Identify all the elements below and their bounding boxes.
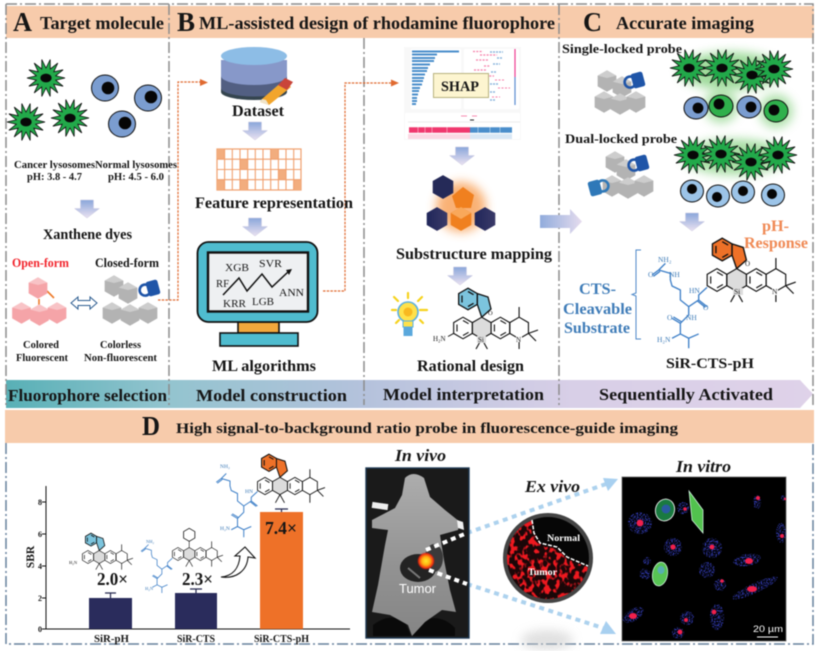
colorless non-fluorescent label: Colorless xyxy=(100,339,142,351)
icon: substructure hexagons xyxy=(427,175,495,232)
CTS cleavable substrate label: CTS- xyxy=(579,281,616,298)
cancer lysosome label xyxy=(14,160,95,183)
normal lysosome label xyxy=(95,160,177,183)
SiR-CTS-pH structure: O xyxy=(745,260,750,268)
label: fluorophore selection: Fluorophore selection xyxy=(8,386,168,405)
lock icon top xyxy=(627,154,650,174)
arrow down xyxy=(74,200,100,218)
dotted arrow to in vitro, upper xyxy=(467,478,618,533)
lock icon xyxy=(138,279,161,299)
heading A xyxy=(13,7,164,37)
molecule SiR-CTS: NH₂ xyxy=(146,539,154,544)
tumor label: Tumor xyxy=(399,582,436,596)
normal cells, not glowing xyxy=(680,180,784,207)
xanthene dyes label: Xanthene dyes xyxy=(43,227,132,243)
heading B xyxy=(177,7,555,37)
x labels: SiR-pH xyxy=(94,634,129,645)
glowing cancer cells xyxy=(670,50,793,94)
SiR-CTS-pH structure: O xyxy=(667,313,673,322)
bar chart: SBR: 8 xyxy=(38,498,42,507)
ex vivo tissue image xyxy=(505,515,591,610)
label: model interpretation: Model interpretation xyxy=(383,385,545,404)
SiR-CTS-pH structure xyxy=(648,238,796,348)
in vivo mouse image xyxy=(366,468,469,638)
single-locked label: Single-locked probe xyxy=(562,41,682,56)
rational design molecule: O xyxy=(488,310,493,317)
icon: monitor with algorithms xyxy=(198,242,318,346)
glowing cancer cells xyxy=(674,136,797,180)
in vivo label: In vivo xyxy=(394,446,446,465)
closed-form molecule xyxy=(103,275,157,326)
SiR-CTS-pH label: SiR-CTS-pH xyxy=(666,356,754,372)
x labels xyxy=(94,634,309,645)
panel D: high signal-to-background imaging xyxy=(25,446,786,650)
cancer lysosome label: Cancer lysosomes xyxy=(14,160,95,171)
bar: SiR-CTS-pH xyxy=(260,509,303,629)
dotted arrow to in vitro, lower xyxy=(467,584,616,634)
pH-response label: Response xyxy=(744,235,808,252)
CTS cleavable substrate label: Substrate xyxy=(564,320,630,337)
panel D header band: High signal-to-background ratio probe in fluorescence-guide imaging xyxy=(176,421,679,437)
SHAP plots xyxy=(404,47,521,140)
blue cells xyxy=(620,495,786,639)
tumor label: Tumor xyxy=(528,568,558,578)
panel B: model construction xyxy=(195,47,353,375)
open-form label: Open-form xyxy=(12,256,70,270)
heading B: B xyxy=(177,7,195,37)
panel: model interpretation xyxy=(392,47,552,375)
rational design molecule: Si xyxy=(478,336,484,344)
soft shadow xyxy=(521,630,573,650)
bar chart: SBR: 0 xyxy=(38,625,42,634)
feature representation label: Feature representation xyxy=(195,195,353,212)
icon: monitor with algorithms: LGB xyxy=(252,297,274,308)
ML algorithms label: ML algorithms xyxy=(212,358,316,375)
SiR-CTS-pH structure: HN xyxy=(689,286,700,295)
normal label: Normal xyxy=(547,534,580,544)
colorless non-fluorescent label: Non-fluorescent xyxy=(84,352,157,364)
molecule SiR-pH: H₂N xyxy=(69,560,78,565)
rational design molecule: N xyxy=(516,336,521,344)
SiR-CTS-pH structure: NH₂ xyxy=(658,255,672,264)
red lysosomes xyxy=(629,496,786,634)
in vitro label: In vitro xyxy=(675,457,731,476)
value labels: 7.4× xyxy=(265,518,297,538)
panel C: accurate imaging xyxy=(562,41,808,372)
label: model construction: Model construction xyxy=(196,386,348,405)
dashed connector B to interpretation xyxy=(323,80,399,291)
bar chart: SBR: 6 xyxy=(38,530,42,539)
bar: SiR-CTS xyxy=(175,589,217,629)
normal cells xyxy=(92,75,162,137)
dashed connector A to B xyxy=(158,79,208,300)
SHAP label box: SHAP xyxy=(441,79,479,95)
molecule SiR-CTS-pH xyxy=(216,454,325,537)
SiR-CTS-pH structure: NH xyxy=(669,270,680,279)
in vitro confocal image xyxy=(620,477,786,641)
molecule SiR-pH xyxy=(69,533,133,570)
bracket xyxy=(632,250,641,339)
SiR-CTS-pH structure: NH xyxy=(686,313,697,322)
rational design label: Rational design xyxy=(417,358,524,375)
bottom process band arrow xyxy=(6,380,813,408)
SiR-CTS-pH structure: N xyxy=(772,287,778,296)
lock icon xyxy=(623,71,646,91)
ex vivo label: Ex vivo xyxy=(524,477,580,496)
lock icon left xyxy=(587,177,610,197)
green cells xyxy=(651,491,703,587)
bar chart: SBR: 2 xyxy=(38,594,42,603)
colorless non-fluorescent label xyxy=(84,339,157,364)
scale bar: 20 µm xyxy=(753,624,783,635)
molecule SiR-CTS: H₂N xyxy=(145,586,154,591)
heading A: A xyxy=(13,7,32,37)
icon: monitor with algorithms: XGB xyxy=(225,263,249,274)
SiR-CTS-pH structure: O xyxy=(648,270,654,279)
x labels: SiR-CTS xyxy=(177,634,215,645)
curved arrow xyxy=(221,547,255,577)
feature representation grid xyxy=(217,149,301,190)
heading B: ML-assisted design of rhodamine fluorophore xyxy=(199,13,555,33)
pH-response label xyxy=(744,218,808,252)
heading C: C xyxy=(583,7,602,37)
molecule SiR-CTS xyxy=(141,528,223,593)
colored fluorescent label: Colored xyxy=(23,339,59,351)
arrow down xyxy=(680,213,704,231)
rational design molecule xyxy=(433,288,538,349)
bar: SiR-pH xyxy=(89,593,132,629)
single-locked molecule xyxy=(595,70,645,115)
pH-response label: pH- xyxy=(762,218,789,235)
rational design molecule: H₂N xyxy=(433,335,446,343)
icon: dataset cylinder xyxy=(221,47,293,105)
x labels: SiR-CTS-pH xyxy=(254,634,309,645)
heading A: Target molecule xyxy=(40,13,164,33)
arrow down xyxy=(450,147,474,165)
colored fluorescent label: Fluorescent xyxy=(16,352,68,364)
dual-locked label: Dual-locked probe xyxy=(565,131,677,146)
header band: sections A B C xyxy=(6,6,814,38)
dual-locked molecule xyxy=(603,151,653,199)
y axis label: SBR xyxy=(25,545,37,568)
CTS cleavable substrate label xyxy=(563,281,632,337)
cancer cells xyxy=(7,60,89,140)
molecule SiR-CTS-pH: H₂N xyxy=(220,526,230,532)
icon: light bulb xyxy=(392,293,427,336)
arrow down xyxy=(448,267,472,285)
value labels xyxy=(97,518,297,589)
CTS cleavable substrate label: Cleavable xyxy=(563,301,632,318)
equilibrium double arrow xyxy=(71,297,97,309)
SiR-CTS-pH structure: O xyxy=(703,303,709,312)
heading C: Accurate imaging xyxy=(616,13,754,33)
value labels: 2.0× xyxy=(97,569,128,589)
arrow down xyxy=(242,122,268,140)
panel D header band xyxy=(5,410,814,443)
molecule SiR-CTS-pH: HN xyxy=(245,489,253,495)
icon: monitor with algorithms: KRR xyxy=(223,299,246,310)
colored fluorescent label xyxy=(16,339,68,364)
dataset label: Dataset xyxy=(232,103,285,120)
closed-form label: Closed-form xyxy=(95,256,160,270)
icon: monitor with algorithms: RF xyxy=(216,279,229,290)
normal cells, partly glowing xyxy=(684,89,793,128)
substructure mapping label: Substructure mapping xyxy=(396,246,552,263)
normal lysosome label: Normal lysosomes xyxy=(95,160,177,171)
label: sequentially activated: Sequentially Activated xyxy=(599,385,774,404)
cancer lysosome label: pH: 3.8 - 4.7 xyxy=(27,172,82,183)
icon: monitor with algorithms: SVR xyxy=(259,259,282,270)
heading C xyxy=(583,7,754,37)
large arrow to panel C xyxy=(540,209,582,234)
SiR-CTS-pH structure: H₂N xyxy=(657,335,671,344)
open-form molecule xyxy=(12,277,66,326)
value labels: 2.3× xyxy=(182,569,213,589)
normal lysosome label: pH: 4.5 - 6.0 xyxy=(108,172,164,183)
panel D header band: D xyxy=(142,411,160,441)
arrow down xyxy=(242,218,268,236)
molecule SiR-CTS-pH: NH₂ xyxy=(220,464,230,470)
bar chart: SBR xyxy=(25,454,350,645)
boundary dashed line xyxy=(532,520,588,566)
panel A: target molecule xyxy=(7,60,177,364)
SiR-CTS-pH structure: Si xyxy=(734,287,740,296)
bar chart: SBR: 4 xyxy=(38,562,42,571)
icon: monitor with algorithms: ANN xyxy=(279,288,304,299)
